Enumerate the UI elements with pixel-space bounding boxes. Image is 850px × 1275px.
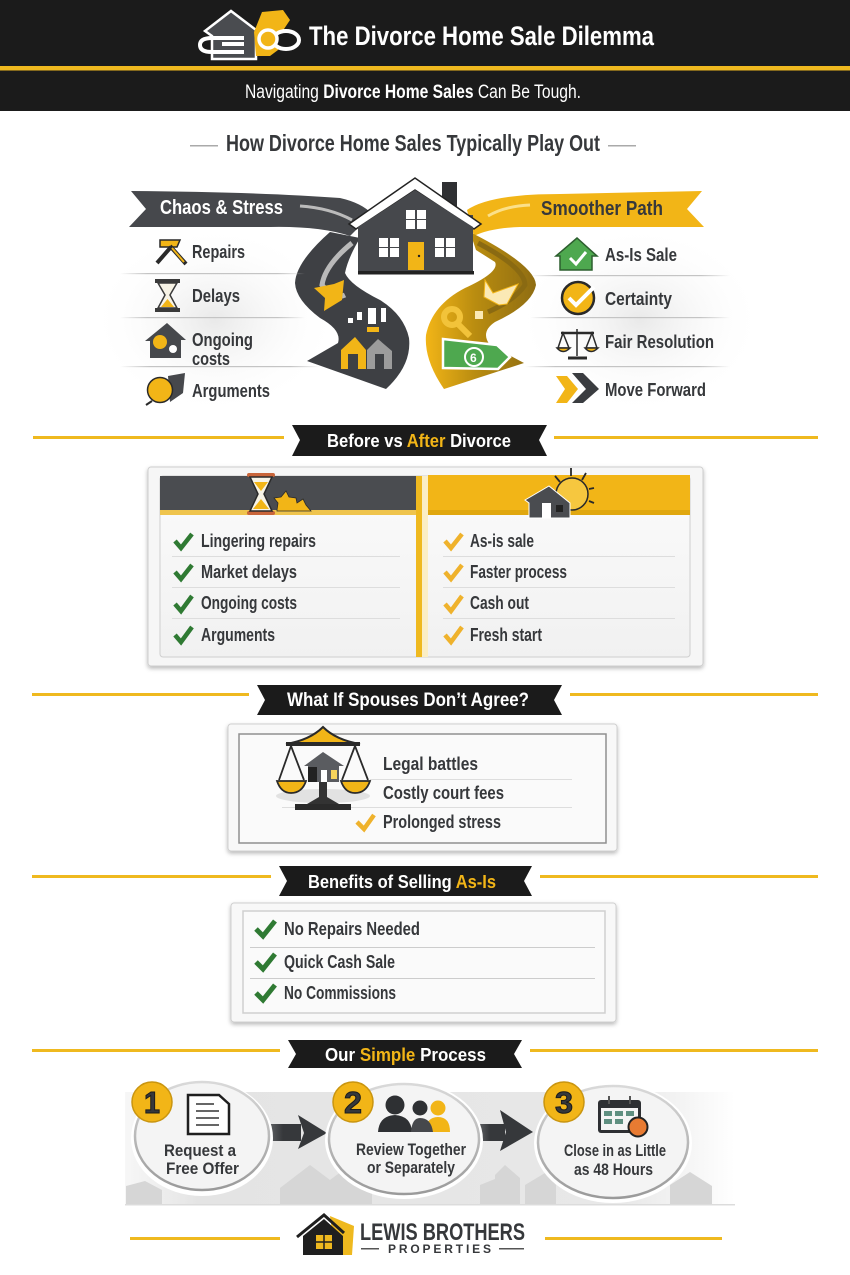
column: before list: Market delays — [201, 562, 297, 582]
column: after list: Fresh start — [470, 625, 542, 645]
costly court fees: Costly court fees — [383, 783, 504, 803]
prolonged stress with check — [357, 812, 501, 832]
panel: benefits — [231, 903, 616, 1022]
prolonged stress with check: Prolonged stress — [383, 812, 501, 832]
badge 2 — [333, 1082, 373, 1122]
icon: document — [188, 1095, 229, 1134]
icon: people — [378, 1096, 450, 1132]
column: after list — [443, 531, 675, 645]
list: chaos items — [120, 240, 320, 405]
right ribbon: smoother path — [467, 191, 704, 236]
column: after list: Faster process — [470, 562, 567, 582]
section banner: benefits of selling as-is: Benefits of Selling As-Is — [308, 871, 496, 892]
arrow 2 — [475, 1110, 533, 1151]
after header — [428, 468, 690, 518]
logo: lewis brothers properties — [130, 1215, 722, 1256]
icon: hourglass — [155, 279, 180, 312]
icon: yellow and grey houses — [341, 337, 392, 369]
badge 3 — [544, 1082, 584, 1122]
step 2 label: Review Together — [356, 1140, 466, 1159]
column: before list: Ongoing costs — [201, 593, 297, 613]
icon: white crown shard — [484, 280, 518, 305]
fair resolution label: Fair Resolution — [605, 332, 714, 352]
before header — [160, 473, 416, 515]
right ribbon: smoother path: Smoother Path — [541, 198, 663, 220]
icon: hammer — [157, 240, 186, 264]
column: before list: Arguments — [201, 625, 275, 645]
heading: how divorce home sales play out: How Divorce Home Sales Typically Play Out — [226, 130, 600, 156]
icon: forward chevrons — [556, 373, 599, 403]
icon: calendar — [598, 1096, 648, 1136]
skyline — [126, 1165, 712, 1204]
icon: cash tag — [443, 339, 510, 369]
icon: key — [444, 309, 483, 336]
panel: disagreement — [228, 724, 617, 851]
logo: lewis brothers properties: LEWIS BROTHERS — [360, 1219, 525, 1246]
panel: before and after comparison — [148, 467, 703, 666]
arguments label: Arguments — [192, 381, 270, 401]
column: after list: As-is sale — [470, 531, 534, 551]
step 2: or Separately — [367, 1158, 455, 1177]
certainty label: Certainty — [605, 289, 672, 309]
no commissions: No Commissions — [284, 983, 396, 1003]
icon: broken yellow shard — [314, 280, 344, 311]
left road — [295, 232, 409, 389]
icon: scales with house — [276, 727, 370, 810]
right road — [426, 232, 536, 389]
icon: cash tag: 6 — [470, 351, 477, 365]
logo: lewis brothers properties: PROPERTIES — [388, 1242, 491, 1256]
ongoing costs label: Ongoing — [192, 330, 253, 350]
icon: scales — [557, 329, 598, 358]
step 3 label: Close in as Little — [564, 1141, 666, 1160]
step 1: Free Offer — [166, 1159, 239, 1178]
as-is sale label: As-Is Sale — [605, 245, 677, 265]
badge 2: 2 — [344, 1085, 362, 1120]
quick cash sale: Quick Cash Sale — [284, 952, 395, 972]
step 2 — [325, 1081, 483, 1199]
badge 3: 3 — [555, 1085, 573, 1120]
icon: debris — [348, 308, 386, 332]
subtitle: Navigating Divorce Home Sales Can Be Tough. — [245, 82, 581, 103]
list: chaos items: costs — [192, 349, 230, 369]
icon: certainty check — [562, 282, 594, 314]
section banner: before vs after — [33, 425, 818, 456]
step 3 — [534, 1082, 692, 1203]
column: after list: Cash out — [470, 593, 529, 613]
left ribbon: chaos and stress — [129, 191, 372, 236]
icon: arguments — [146, 373, 185, 405]
step 1 — [131, 1080, 273, 1196]
legal battles: Legal battles — [383, 754, 478, 774]
section banner: what if spouses don't agree — [32, 685, 818, 715]
badge 1 — [132, 1082, 172, 1122]
header band — [0, 0, 850, 111]
icon: green house check — [556, 238, 597, 270]
no repairs needed: No Repairs Needed — [284, 919, 420, 939]
move forward label: Move Forward — [605, 380, 706, 400]
icon: hourglass and coins — [247, 473, 311, 515]
column: before list — [172, 531, 400, 645]
icon: logo house — [297, 1215, 354, 1255]
icon: house with sun — [525, 468, 594, 518]
section banner: benefits of selling as-is — [32, 866, 818, 896]
left ribbon: chaos and stress: Chaos & Stress — [160, 197, 283, 219]
step 1 label: Request a — [164, 1141, 236, 1160]
step 3: as 48 Hours — [574, 1160, 653, 1179]
icon: chained houses — [200, 10, 299, 59]
title: The Divorce Home Sale Dilemma — [309, 21, 655, 51]
delays label: Delays — [192, 286, 240, 306]
icon: damaged house with coin — [145, 323, 186, 358]
process band — [125, 1080, 735, 1206]
repairs label: Repairs — [192, 242, 245, 262]
panel: paths diagram — [90, 178, 765, 415]
section banner: our simple process — [32, 1040, 818, 1068]
list: smoother items — [525, 238, 730, 403]
column: before list: Lingering repairs — [201, 531, 316, 551]
section banner: what if spouses don't agree: What If Spouses Don’t Agree? — [287, 690, 529, 711]
house — [349, 178, 481, 274]
section banner: our simple process: Our Simple Process — [325, 1044, 486, 1065]
center divider — [416, 476, 422, 657]
badge 1: 1 — [144, 1085, 160, 1120]
section banner: before vs after: Before vs After Divorce — [327, 430, 511, 451]
arrow 1 — [265, 1115, 327, 1149]
